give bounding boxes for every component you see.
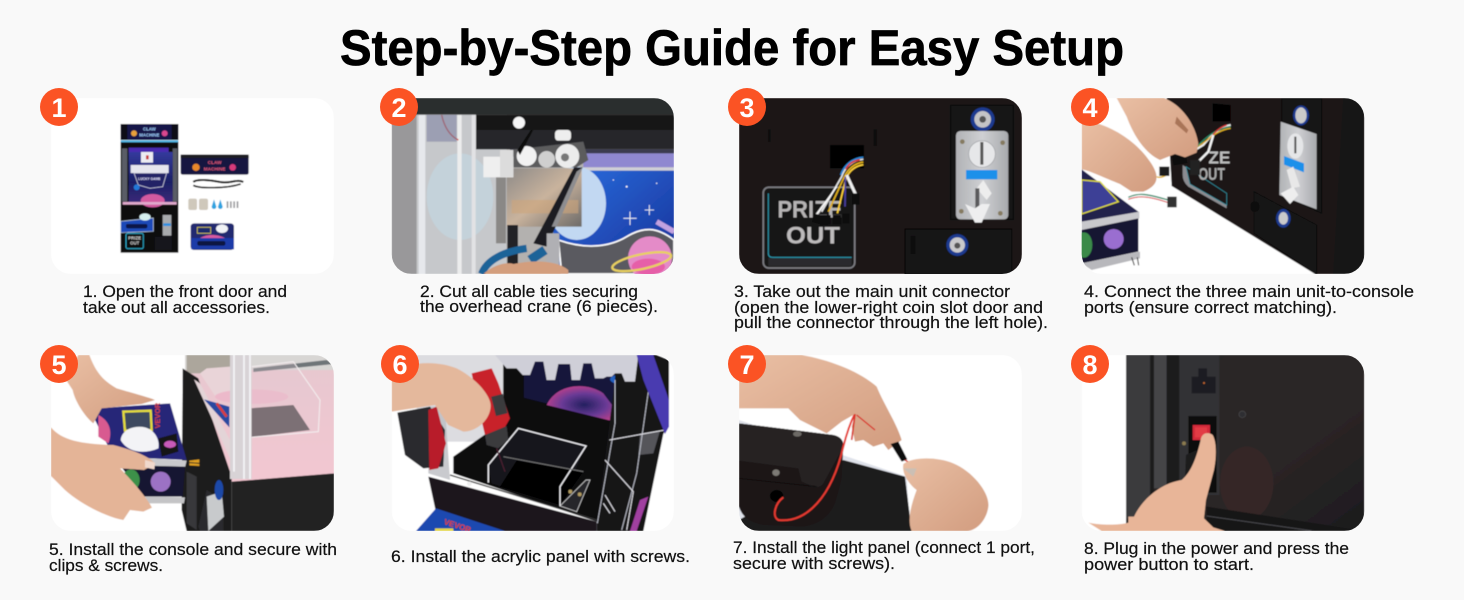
caption 3: (open the lower-right coin slot door and bbox=[734, 298, 1043, 317]
caption 7: secure with screws). bbox=[733, 554, 895, 573]
photo: main unit connector: OUT bbox=[786, 222, 840, 249]
caption 5 bbox=[49, 540, 337, 575]
caption 2 bbox=[420, 282, 658, 316]
photo: connecting ports bbox=[1076, 98, 1364, 274]
caption 5: 5. Install the console and secure with bbox=[49, 540, 337, 559]
photo: connecting ports: ZE bbox=[1208, 147, 1230, 167]
caption 4: 4. Connect the three main unit-to-console bbox=[1084, 282, 1414, 301]
caption 3 bbox=[734, 282, 1048, 332]
photo: installing acrylic panel bbox=[392, 355, 674, 535]
step 2 bbox=[380, 88, 674, 316]
badge 7 bbox=[728, 345, 766, 383]
caption 5: clips & screws. bbox=[49, 556, 163, 575]
photo: main unit connector: PRIZE bbox=[777, 196, 842, 223]
photo: machine and accessories: MACHINE bbox=[204, 166, 226, 171]
step 5 bbox=[40, 345, 337, 575]
title: Step-by-Step Guide for Easy Setup bbox=[340, 20, 1124, 76]
badge 4 bbox=[1071, 88, 1109, 126]
badge 6: 6 bbox=[392, 350, 408, 380]
caption 1: take out all accessories. bbox=[83, 298, 270, 317]
caption 2: 2. Cut all cable ties securing bbox=[420, 282, 638, 301]
photo: machine and accessories bbox=[120, 124, 250, 254]
caption 7: 7. Install the light panel (connect 1 port, bbox=[733, 538, 1035, 557]
caption 8: power button to start. bbox=[1084, 555, 1254, 574]
badge 5: 5 bbox=[51, 350, 67, 380]
badge 2: 2 bbox=[391, 93, 407, 123]
photo: cutting cable ties bbox=[392, 98, 674, 280]
caption 1 bbox=[83, 282, 287, 317]
badge 2 bbox=[380, 88, 418, 126]
badge 8: 8 bbox=[1082, 350, 1098, 380]
photo: plugging in power bbox=[1082, 355, 1364, 531]
photo: installing acrylic panel: VEVOR bbox=[443, 517, 472, 535]
photo: main unit connector bbox=[739, 98, 1022, 276]
photo: installing console bbox=[51, 355, 334, 531]
badge 1 bbox=[40, 88, 78, 126]
photo: machine and accessories: CLAW bbox=[143, 127, 157, 132]
step 3 bbox=[728, 88, 1048, 332]
badge 5 bbox=[40, 345, 78, 383]
step 1 bbox=[40, 88, 286, 314]
caption 8: 8. Plug in the power and press the bbox=[1084, 539, 1349, 558]
photo: machine and accessories: MACHINE bbox=[139, 133, 160, 138]
photo: machine and accessories: CLAW bbox=[208, 160, 222, 165]
badge 3: 3 bbox=[739, 93, 755, 123]
caption 1: 1. Open the front door and bbox=[83, 282, 287, 301]
photo: installing console: VEVOR bbox=[153, 402, 162, 428]
step 6 bbox=[381, 345, 690, 566]
badge 1: 1 bbox=[51, 93, 67, 123]
photo: connecting ports: OUT bbox=[1198, 164, 1225, 184]
badge 3 bbox=[728, 88, 766, 126]
caption 3: 3. Take out the main unit connector bbox=[734, 282, 1010, 301]
badge 8 bbox=[1071, 345, 1109, 383]
caption 4 bbox=[1084, 282, 1414, 317]
caption 7 bbox=[733, 538, 1035, 573]
badge 6 bbox=[381, 345, 419, 383]
photo: machine and accessories: PRIZE bbox=[128, 235, 141, 240]
step 8 bbox=[1071, 345, 1364, 574]
step 4 bbox=[1071, 88, 1414, 317]
photo: installing light panel bbox=[739, 355, 989, 531]
photo: machine and accessories: LUCKY GAME bbox=[138, 177, 161, 181]
badge 4: 4 bbox=[1082, 93, 1098, 123]
caption 4: ports (ensure correct matching). bbox=[1084, 298, 1337, 317]
step 7 bbox=[728, 345, 1035, 573]
caption 6: 6. Install the acrylic panel with screws. bbox=[391, 547, 690, 566]
badge 7: 7 bbox=[739, 350, 755, 380]
caption 8 bbox=[1084, 539, 1349, 574]
caption 2: the overhead crane (6 pieces). bbox=[420, 297, 658, 316]
photo: machine and accessories: OUT bbox=[130, 241, 140, 246]
caption 3: pull the connector through the left hole). bbox=[734, 313, 1048, 332]
